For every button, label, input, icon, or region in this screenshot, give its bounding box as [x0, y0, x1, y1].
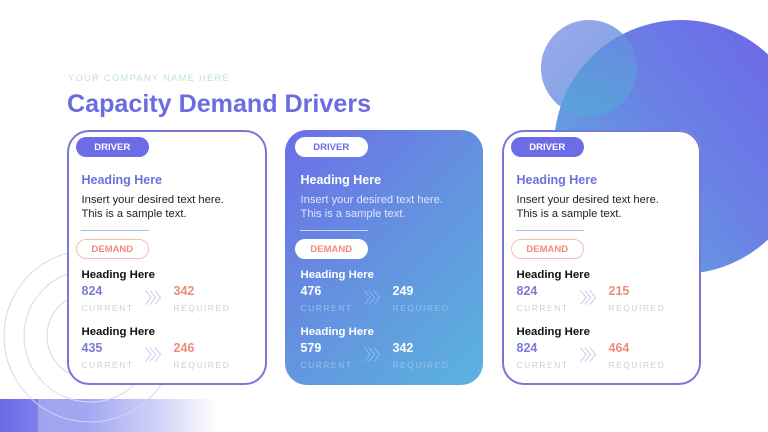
required value: 464	[608, 341, 629, 355]
icon: chevrons	[145, 347, 161, 362]
demand pill: DEMAND	[526, 244, 568, 255]
driver pill	[76, 137, 148, 157]
driver text: Insert your desired text here.	[82, 194, 224, 206]
row heading: Heading Here	[300, 269, 374, 281]
required label: REQUIRED	[392, 360, 449, 370]
required label: REQUIRED	[608, 360, 665, 370]
required value: 342	[392, 341, 413, 355]
current value: 476	[300, 284, 321, 298]
required label: REQUIRED	[174, 303, 230, 313]
driver text: This is a sample text.	[516, 208, 622, 220]
required value: 246	[174, 341, 194, 355]
driver text	[82, 194, 224, 220]
required value: 342	[174, 284, 194, 298]
required label: REQUIRED	[174, 360, 230, 370]
current label: CURRENT	[516, 360, 569, 370]
current value: 824	[516, 284, 537, 298]
driver pill: DRIVER	[313, 142, 349, 153]
demand row 2	[82, 326, 230, 370]
icon: chevrons	[145, 290, 161, 305]
demand row 2	[300, 326, 449, 370]
icon: chevrons	[580, 347, 596, 362]
panel: driver card 2	[285, 130, 483, 385]
row heading: Heading Here	[300, 326, 374, 338]
driver heading: Heading Here	[82, 173, 162, 187]
bottom gradient bar	[0, 399, 218, 432]
demand pill: DEMAND	[310, 244, 352, 255]
row heading: Heading Here	[82, 269, 155, 281]
current label: CURRENT	[300, 303, 353, 313]
required value: 215	[608, 284, 629, 298]
demand pill	[295, 239, 368, 259]
row heading: Heading Here	[82, 326, 155, 338]
required label: REQUIRED	[608, 303, 665, 313]
driver text	[300, 194, 443, 220]
required label: REQUIRED	[392, 303, 449, 313]
current label: CURRENT	[82, 360, 134, 370]
current value: 579	[300, 341, 321, 355]
driver text	[516, 194, 659, 220]
demand row 1	[300, 269, 449, 313]
demand pill: DEMAND	[91, 244, 133, 255]
driver pill	[511, 137, 584, 157]
panel: driver card 1	[67, 130, 267, 385]
driver text: This is a sample text.	[82, 208, 187, 220]
icon: chevrons	[364, 290, 380, 305]
driver text: Insert your desired text here.	[516, 194, 659, 206]
driver pill: DRIVER	[529, 142, 565, 153]
current label: CURRENT	[82, 303, 134, 313]
driver text: This is a sample text.	[300, 208, 406, 220]
icon: chevrons	[364, 347, 380, 362]
title: Capacity Demand Drivers	[67, 90, 371, 118]
demand row 1	[516, 269, 665, 313]
company name: YOUR COMPANY NAME HERE	[68, 73, 230, 83]
decorative large gradient circle	[555, 20, 768, 272]
demand pill	[511, 239, 584, 259]
row heading: Heading Here	[516, 326, 590, 338]
row heading: Heading Here	[516, 269, 590, 281]
current value: 435	[82, 341, 102, 355]
driver pill	[295, 137, 368, 157]
current value: 824	[82, 284, 102, 298]
required value: 249	[392, 284, 413, 298]
driver pill: DRIVER	[94, 142, 130, 153]
panel: driver card 3	[502, 130, 701, 385]
demand row 2	[516, 326, 665, 370]
demand pill	[76, 239, 148, 259]
driver text: Insert your desired text here.	[300, 194, 443, 206]
demand row 1	[82, 269, 230, 313]
driver heading: Heading Here	[516, 173, 597, 187]
current label: CURRENT	[300, 360, 353, 370]
icon: chevrons	[580, 290, 596, 305]
driver heading: Heading Here	[300, 173, 381, 187]
current value: 824	[516, 341, 537, 355]
current label: CURRENT	[516, 303, 569, 313]
